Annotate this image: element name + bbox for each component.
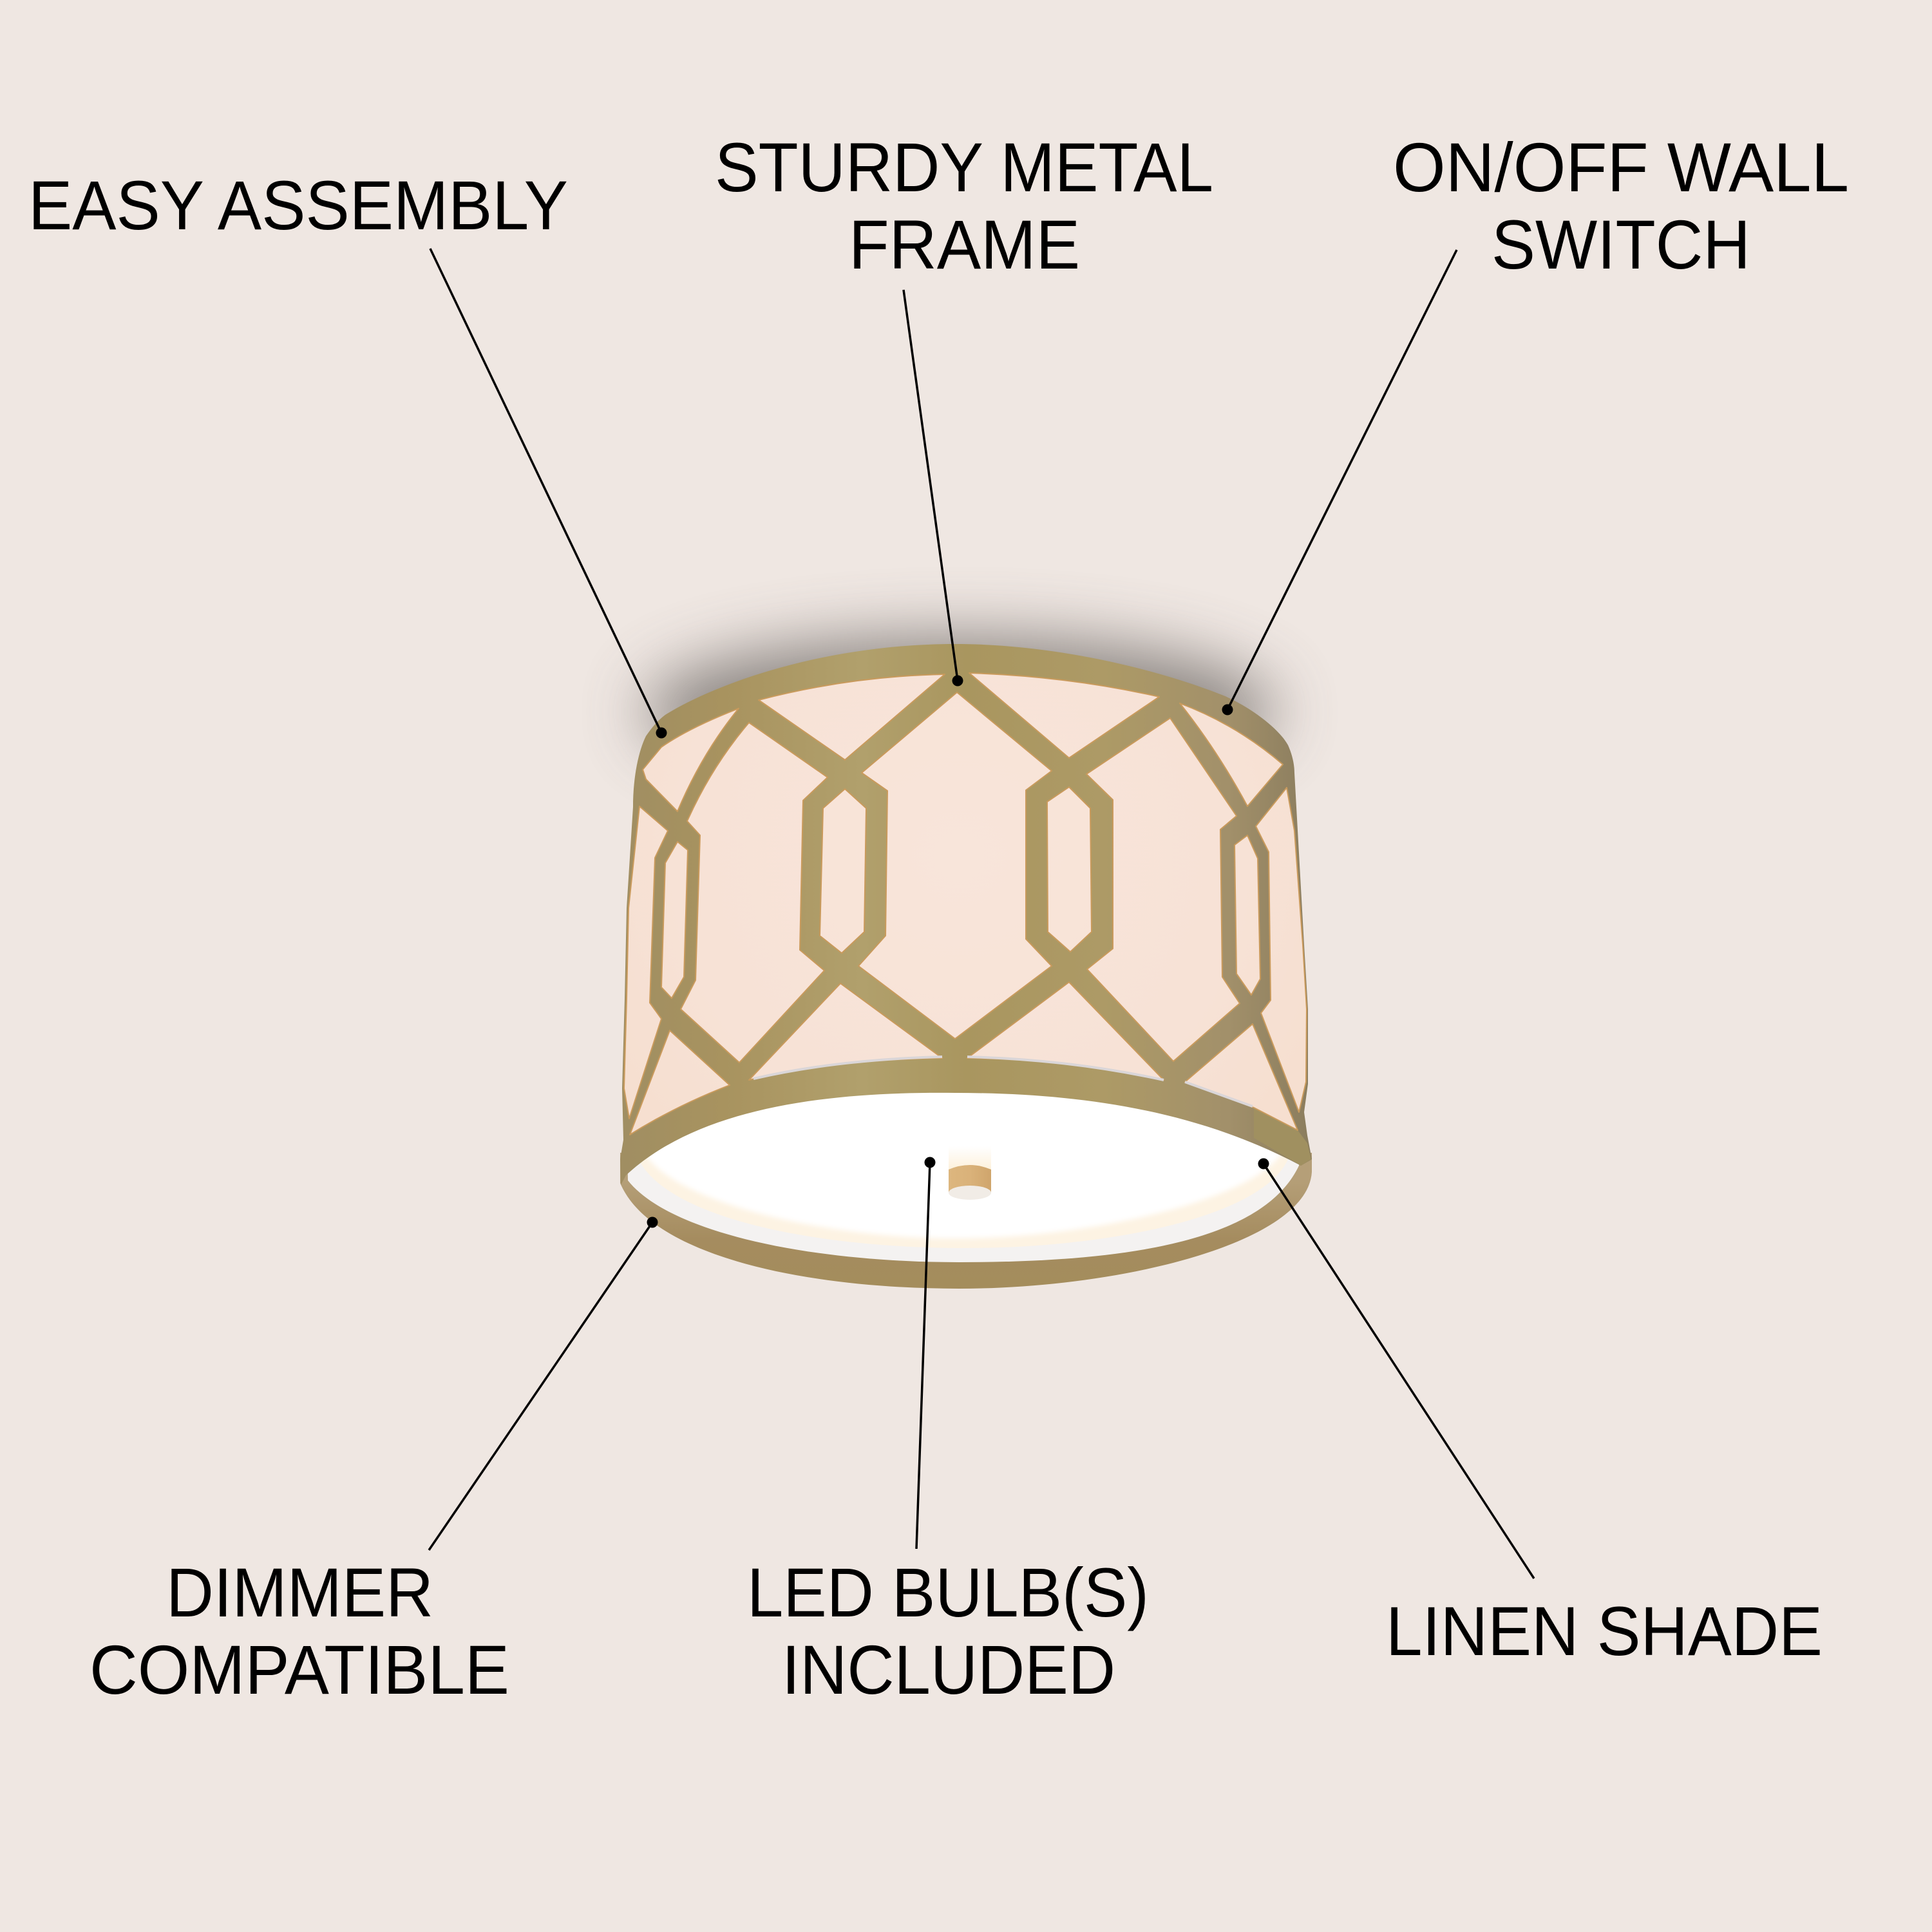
label line 1: DIMMER [166, 1553, 433, 1631]
callout: linen shade [1258, 1158, 1823, 1670]
label line 2: FRAME [849, 205, 1080, 283]
leader line [429, 1222, 652, 1550]
callout: led bulbs included [747, 1157, 1149, 1709]
marker dot [656, 728, 667, 738]
leader line [430, 249, 661, 733]
label: EASY ASSEMBLY [28, 166, 568, 244]
label line 2: INCLUDED [782, 1631, 1115, 1709]
linen panels [624, 673, 1307, 1135]
marker dot [647, 1217, 658, 1227]
finial [949, 1165, 991, 1200]
label line 1: STURDY METAL [715, 128, 1213, 206]
leader line [1227, 250, 1457, 710]
diffuser cream band [639, 1088, 1288, 1248]
callout: easy assembly [28, 166, 667, 738]
marker dot [1258, 1158, 1269, 1170]
callout: on/off wall switch [1222, 128, 1849, 715]
diffuser glow [644, 1082, 1282, 1238]
label line 1: LED BULB(S) [747, 1553, 1149, 1631]
leader line [1264, 1164, 1534, 1578]
label line 2: COMPATIBLE [90, 1631, 509, 1709]
fabric hem [753, 1057, 1253, 1106]
callout: dimmer compatible [90, 1217, 658, 1709]
diffuser rim [626, 1088, 1302, 1262]
marker dot [925, 1157, 935, 1168]
finial cap [949, 1186, 991, 1200]
finial body [949, 1165, 991, 1193]
leader line [904, 290, 958, 681]
callout: sturdy metal frame [715, 128, 1213, 687]
light fixture [620, 638, 1312, 1289]
label line 2: SWITCH [1492, 205, 1750, 283]
marker dot [1222, 705, 1233, 715]
label: LINEN SHADE [1386, 1592, 1823, 1670]
leader line [916, 1162, 930, 1549]
band seam patch [1254, 1108, 1311, 1166]
ceiling shadow [644, 638, 1275, 786]
marker dot [952, 675, 963, 687]
lower metal ring [620, 1153, 1312, 1289]
finial reflection [949, 1146, 991, 1170]
metal frame [620, 644, 1312, 1185]
label line 1: ON/OFF WALL [1393, 128, 1849, 206]
